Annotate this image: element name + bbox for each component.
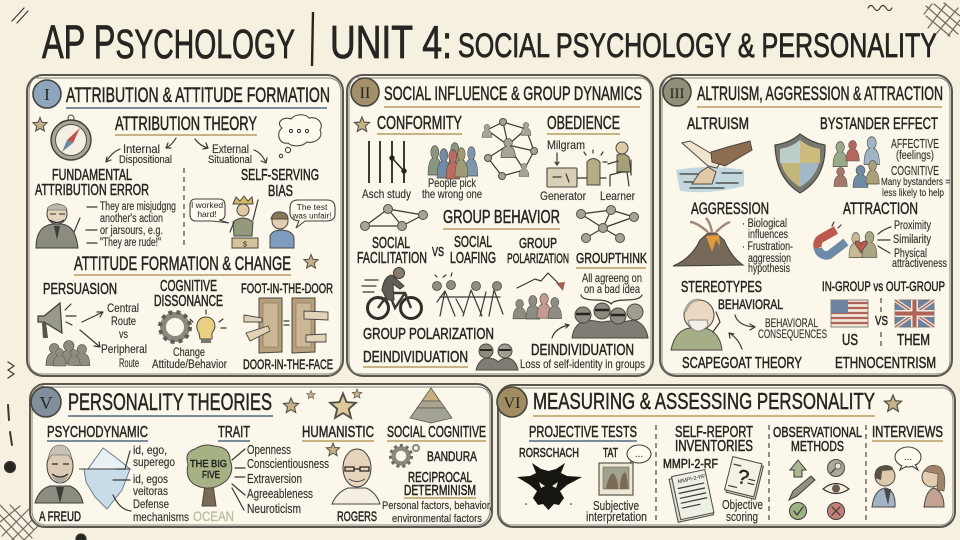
caption: subjective interpretation — [586, 499, 647, 524]
subheading: group behavior: GROUP BEHAVIOR — [443, 207, 560, 227]
label: scapegoat theory: SCAPEGOAT THEORY — [682, 355, 802, 372]
label: deindividuation: DEINDIVIDUATION — [363, 349, 468, 366]
text: bystander details: AFFECTIVE — [891, 137, 939, 151]
label: A Freud: A FREUD — [39, 508, 81, 524]
text: reciprocal factors: environmental factors — [392, 513, 482, 525]
illustration: Milgram experiment — [547, 138, 631, 187]
subheading: fundamental attribution error — [35, 167, 149, 199]
label: reciprocal determinism: DETERMINISM — [404, 483, 476, 499]
label: group polarization: GROUP POLARIZATION — [363, 326, 494, 343]
icon: star — [884, 395, 902, 411]
heading: social influence and group dynamics: SOCIAL INFLUENCE & GROUP DYNAMICS — [384, 84, 642, 105]
illustration: Big Five tree: THE BIG — [190, 458, 227, 470]
text: aggression causes: hypothesis — [748, 263, 790, 275]
arrows and labels: internal and external: External — [212, 142, 249, 156]
subheading: fundamental attribution error: ATTRIBUTION ERROR — [35, 182, 149, 199]
text: misjudging explanation: another's action — [100, 213, 163, 225]
subheading: observational methods: OBSERVATIONAL — [773, 424, 862, 441]
labels: social facilitation vs loafing: SOCIAL — [454, 234, 492, 251]
badge II — [351, 78, 379, 106]
text: aggression causes: · Frustration- — [742, 241, 793, 253]
subheading: cognitive dissonance: COGNITIVE — [160, 278, 217, 295]
label: TAT: TAT — [603, 445, 618, 460]
subheading: projective tests: PROJECTIVE TESTS — [529, 424, 637, 441]
labels: social facilitation vs loafing: SOCIAL — [372, 235, 410, 252]
illustration: Big Five tree — [187, 445, 232, 506]
text: reciprocal factors: Personal factors, behavior, — [382, 500, 492, 512]
subheading: attribution theory: ATTRIBUTION THEORY — [115, 114, 257, 135]
arrows and labels: internal and external: Internal — [123, 142, 160, 156]
icon: magnifier badge — [828, 460, 844, 476]
icon: thought cloud — [279, 115, 321, 158]
caption: Asch study: Asch study — [362, 187, 411, 201]
subheading: door-in-the-face: DOOR-IN-THE-FACE — [243, 356, 333, 372]
icon: pyramid — [410, 388, 452, 423]
caption: objective scoring: Objective — [722, 498, 763, 512]
definition: deindividuation: DEINDIVIDUATION — [531, 342, 634, 359]
icon: gears — [390, 445, 419, 466]
diagram: groupthink network — [576, 206, 638, 242]
icon: UK flag — [895, 300, 934, 327]
panel VI: measuring and assessing personality — [497, 385, 955, 527]
illustration: excuse-making student — [270, 212, 294, 248]
speech bubble: I worked hard: hard! — [197, 209, 217, 219]
subheading: attitude formation and change: ATTITUDE FORMATION & CHANGE — [74, 254, 291, 275]
illustration: Milgram experiment: Milgram — [547, 138, 585, 152]
label: MMPI-2-RF: MMPI-2-RF — [663, 456, 718, 471]
subheading: self-report inventories — [675, 424, 753, 455]
text: change attitude behavior: Attitude/Behavior — [152, 359, 227, 371]
illustration: anonymous faces — [476, 344, 518, 370]
label: Rogers: ROGERS — [337, 508, 377, 524]
subheading: stereotypes: STEREOTYPES — [681, 279, 762, 296]
caption: objective scoring: scoring — [726, 510, 758, 524]
subheading: foot-in-the-door: FOOT-IN-THE-DOOR — [241, 280, 333, 296]
illustration: pointing man — [36, 204, 80, 248]
arrows and labels: internal and external: Situational — [208, 154, 252, 166]
captions: generator and learner: Learner — [600, 189, 635, 203]
icon: cross mark — [828, 502, 844, 520]
arrows and labels: internal and external — [106, 138, 267, 166]
label: reciprocal determinism: RECIPROCAL — [408, 470, 472, 486]
illustration: polarized crowd with arrow — [513, 273, 565, 319]
icon: magnet — [817, 222, 846, 255]
speech bubble: the test was unfair — [290, 200, 335, 228]
subheading: cognitive dissonance: DISSONANCE — [154, 293, 223, 310]
label: behavioral consequences — [758, 316, 827, 341]
callout: all agreeing on a bad idea — [581, 271, 642, 304]
subheading: altruism: ALTRUISM — [687, 114, 749, 133]
list: attraction factors: Proximity — [894, 220, 931, 232]
label: group polarization: GROUP — [519, 236, 557, 252]
definition: deindividuation — [520, 342, 645, 371]
subheading: self-serving bias: BIAS — [268, 183, 293, 200]
text: bystander details — [881, 137, 950, 199]
subheading: psychodynamic: PSYCHODYNAMIC — [47, 424, 148, 441]
list: Big Five traits: Openness — [247, 443, 291, 457]
title: AP PSYCHOLOGY — [42, 15, 295, 68]
icon: compass — [51, 115, 91, 160]
text: bystander details: COGNITIVE — [891, 164, 939, 178]
list: psychodynamic concepts: veitoras — [133, 484, 168, 498]
arrows: behavior and scapegoat — [729, 315, 755, 349]
illustration: conforming crowd — [428, 143, 478, 179]
icon: up arrow — [790, 460, 806, 477]
badge II: II — [360, 85, 370, 102]
subheading: obedience: OBEDIENCE — [547, 113, 620, 133]
list: psychodynamic concepts — [133, 443, 189, 524]
badge V — [31, 387, 61, 417]
subheading: observational methods: METHODS — [791, 438, 844, 455]
icon: pen — [789, 476, 815, 500]
text: aggression causes: · Biological — [742, 218, 787, 230]
panel I: attribution and attitude formation — [27, 75, 343, 376]
subheading: self-serving bias — [241, 167, 319, 200]
labels: us and them: US — [842, 332, 858, 349]
caption: subjective interpretation: interpretation — [586, 510, 647, 524]
icon: MMPI document: MMPI-2-RF — [677, 473, 707, 485]
illustration: interviewee woman — [922, 465, 945, 507]
text: misjudging explanation — [86, 201, 176, 249]
list: Big Five traits: Extraversion — [247, 472, 302, 486]
badge VI: VI — [504, 395, 520, 412]
subheading: observational methods — [773, 424, 862, 455]
label: behavioral: BEHAVIORAL — [718, 296, 783, 312]
icon: star — [326, 443, 340, 456]
text: persuasion routes: Route — [119, 356, 139, 370]
list: Big Five traits: Neuroticism — [247, 502, 301, 516]
badge I: I — [44, 85, 50, 104]
text: persuasion routes: Peripheral — [101, 342, 147, 356]
caption: people pick the wrong one — [422, 176, 482, 201]
diagram: small group network — [360, 204, 428, 230]
list: psychodynamic concepts: id, ego, — [133, 443, 167, 457]
captions: generator and learner: Generator — [540, 189, 586, 203]
subheading: social cognitive: SOCIAL COGNITIVE — [387, 424, 486, 441]
illustration: Big Five tree: FIVE — [202, 469, 220, 481]
badge I — [33, 80, 61, 108]
speech bubble: the test was unfair: was unfair! — [292, 212, 331, 220]
speech bubble: the test was unfair: The test — [297, 202, 328, 212]
subheading: humanistic: HUMANISTIC — [302, 424, 374, 441]
captions: generator and learner — [540, 189, 635, 203]
illustration: winner on podium — [230, 196, 258, 248]
text: misjudging explanation: or jarsours, e.g. — [100, 225, 163, 237]
definition: deindividuation: Loss of self-identity in groups — [520, 357, 645, 371]
illustration: helping hand over water — [676, 141, 752, 192]
icon: question-mark papers — [724, 457, 764, 499]
label: Rorschach: RORSCHACH — [519, 445, 579, 460]
icon: two doors with hands — [244, 298, 328, 353]
list: Big Five traits: Conscientiousness — [247, 457, 329, 471]
illustration: iceberg — [79, 448, 131, 511]
illustration: interviewer man — [872, 465, 895, 507]
text: persuasion routes: Route — [111, 314, 136, 328]
panel II: social influence and group dynamics — [347, 75, 653, 376]
title: UNIT 4: — [330, 16, 452, 68]
icon: cluster of stars — [283, 389, 362, 418]
caption: objective scoring — [722, 498, 763, 524]
labels: social facilitation vs loafing: LOAFING — [450, 250, 496, 267]
badge VI — [497, 387, 527, 417]
icon: gear — [160, 312, 190, 342]
labels: us and them — [842, 332, 930, 349]
list: psychodynamic concepts: mechanisms — [133, 510, 189, 524]
icon: question-mark papers: ? — [735, 466, 751, 490]
list: attraction factors — [878, 220, 947, 270]
diagram: influence network — [482, 118, 538, 180]
subheading: self-serving bias: SELF-SERVING — [241, 167, 319, 184]
caption: subjective interpretation: Subjective — [593, 499, 639, 513]
illustration: Rogers portrait — [332, 449, 380, 504]
subheading: self-report inventories: INVENTORIES — [675, 438, 753, 455]
illustration: tug of war — [432, 273, 503, 316]
subheading: cognitive dissonance — [154, 278, 223, 310]
illustration: Freud portrait — [35, 445, 83, 503]
icon: star — [33, 118, 47, 131]
arrows: tree to traits — [232, 449, 245, 510]
list: psychodynamic concepts: Defense — [133, 497, 169, 511]
badge III — [663, 78, 691, 106]
text: bystander details: (feelings) — [896, 150, 934, 162]
text: aggression causes: influences — [748, 229, 788, 241]
arrows and labels: internal and external: Dispositional — [119, 154, 172, 166]
list: attraction factors: Similarity — [893, 234, 931, 246]
icon: light bulb — [190, 310, 226, 343]
label: reciprocal determinism — [404, 470, 476, 499]
text: reciprocal factors — [382, 500, 492, 525]
labels: social facilitation vs loafing — [357, 234, 496, 267]
list: psychodynamic concepts: superego — [133, 455, 175, 469]
callout: all agreeing on a bad idea: All agreeng on — [582, 271, 642, 285]
text: VS: VS — [875, 313, 888, 328]
label: group polarization — [507, 236, 569, 266]
list: Big Five traits: Agreeableness — [247, 487, 313, 501]
subheading: aggression: AGGRESSION — [691, 199, 769, 218]
callout: all agreeing on a bad idea: on a bad idea — [584, 282, 640, 296]
icon: megaphone and audience — [38, 303, 90, 366]
heading: personality theories: PERSONALITY THEORIES — [68, 389, 272, 416]
labels: us and them: THEM — [897, 332, 930, 349]
illustration: cyclist — [362, 268, 422, 318]
label: OCEAN: OCEAN — [193, 509, 234, 524]
label: group polarization: POLARIZATION — [507, 251, 569, 266]
labels: social facilitation vs loafing: FACILITATION — [357, 250, 427, 267]
icon: TAT speech bubble — [625, 445, 651, 467]
icon: Rorschach inkblot — [517, 463, 582, 510]
text: change attitude behavior: Change — [173, 345, 205, 359]
illustration: interview speech bubble: ... — [904, 452, 912, 463]
arrows: central and peripheral route — [80, 312, 103, 347]
icon: star — [304, 254, 318, 268]
text: aggression causes — [742, 218, 793, 275]
text: misjudging explanation: "They are rude!" — [100, 237, 161, 249]
list: attraction factors: Physical — [894, 248, 927, 260]
subheading: trait: TRAIT — [218, 424, 250, 441]
caption: people pick the wrong one: the wrong one — [422, 187, 482, 201]
speech bubble: I worked hard: I worked — [191, 200, 223, 210]
subheading: persuasion: PERSUASION — [43, 281, 117, 298]
icon: check mark — [790, 502, 806, 520]
label: groupthink: GROUPTHINK — [576, 250, 647, 267]
text: bystander details: less likely to help — [882, 187, 944, 199]
illustration: thinking old man — [671, 300, 722, 350]
text: persuasion routes — [101, 301, 147, 370]
text: aggression causes: aggression — [748, 253, 791, 265]
subheading: self-report inventories: SELF-REPORT — [675, 424, 753, 441]
illustration: bystanders — [833, 137, 879, 188]
list: psychodynamic concepts: id, egos — [133, 472, 168, 486]
heading: attribution and attitude formation: ATTRIBUTION & ATTITUDE FORMATION — [66, 84, 330, 107]
text: misjudging explanation: They are misjudgng — [100, 201, 176, 213]
label: behavioral consequences: BEHAVIORAL — [765, 316, 818, 330]
icon: TAT picture card — [599, 463, 633, 495]
labels: social facilitation vs loafing: VS — [432, 244, 444, 259]
icon: US flag — [831, 300, 868, 327]
speech bubble: I worked hard — [190, 199, 229, 223]
subheading: attraction: ATTRACTION — [843, 199, 918, 218]
panel V: personality theories — [30, 384, 492, 527]
illustration: interview speech bubble — [895, 447, 921, 470]
illustration: Asch lines — [369, 141, 406, 183]
icon: shield — [775, 134, 825, 193]
subheading: fundamental attribution error: FUNDAMENTAL — [52, 167, 132, 184]
icon: eye — [823, 484, 849, 494]
illustration: erupting volcano — [673, 218, 743, 266]
text: persuasion routes: vs — [119, 327, 128, 341]
icon: MMPI document — [669, 470, 714, 522]
icon: star — [354, 117, 370, 131]
label: Bandura: BANDURA — [427, 448, 477, 464]
illustration: winner on podium: $ — [243, 242, 247, 248]
illustration: masked group — [552, 303, 648, 338]
panel III: altruism, aggression and attraction — [660, 75, 952, 376]
title — [42, 12, 937, 68]
text: change attitude behavior — [152, 345, 227, 371]
list: Big Five traits — [247, 443, 329, 516]
badge V: V — [40, 393, 52, 413]
subheading: conformity: CONFORMITY — [377, 113, 462, 133]
illustration: two people with heart — [849, 232, 877, 258]
icon: TAT speech bubble: ... — [635, 449, 643, 460]
caption: people pick the wrong one: People pick — [428, 176, 477, 190]
badge III: III — [670, 86, 684, 102]
text: persuasion routes: Central — [107, 301, 139, 315]
label: behavioral consequences: CONSEQUENCES — [758, 327, 827, 341]
